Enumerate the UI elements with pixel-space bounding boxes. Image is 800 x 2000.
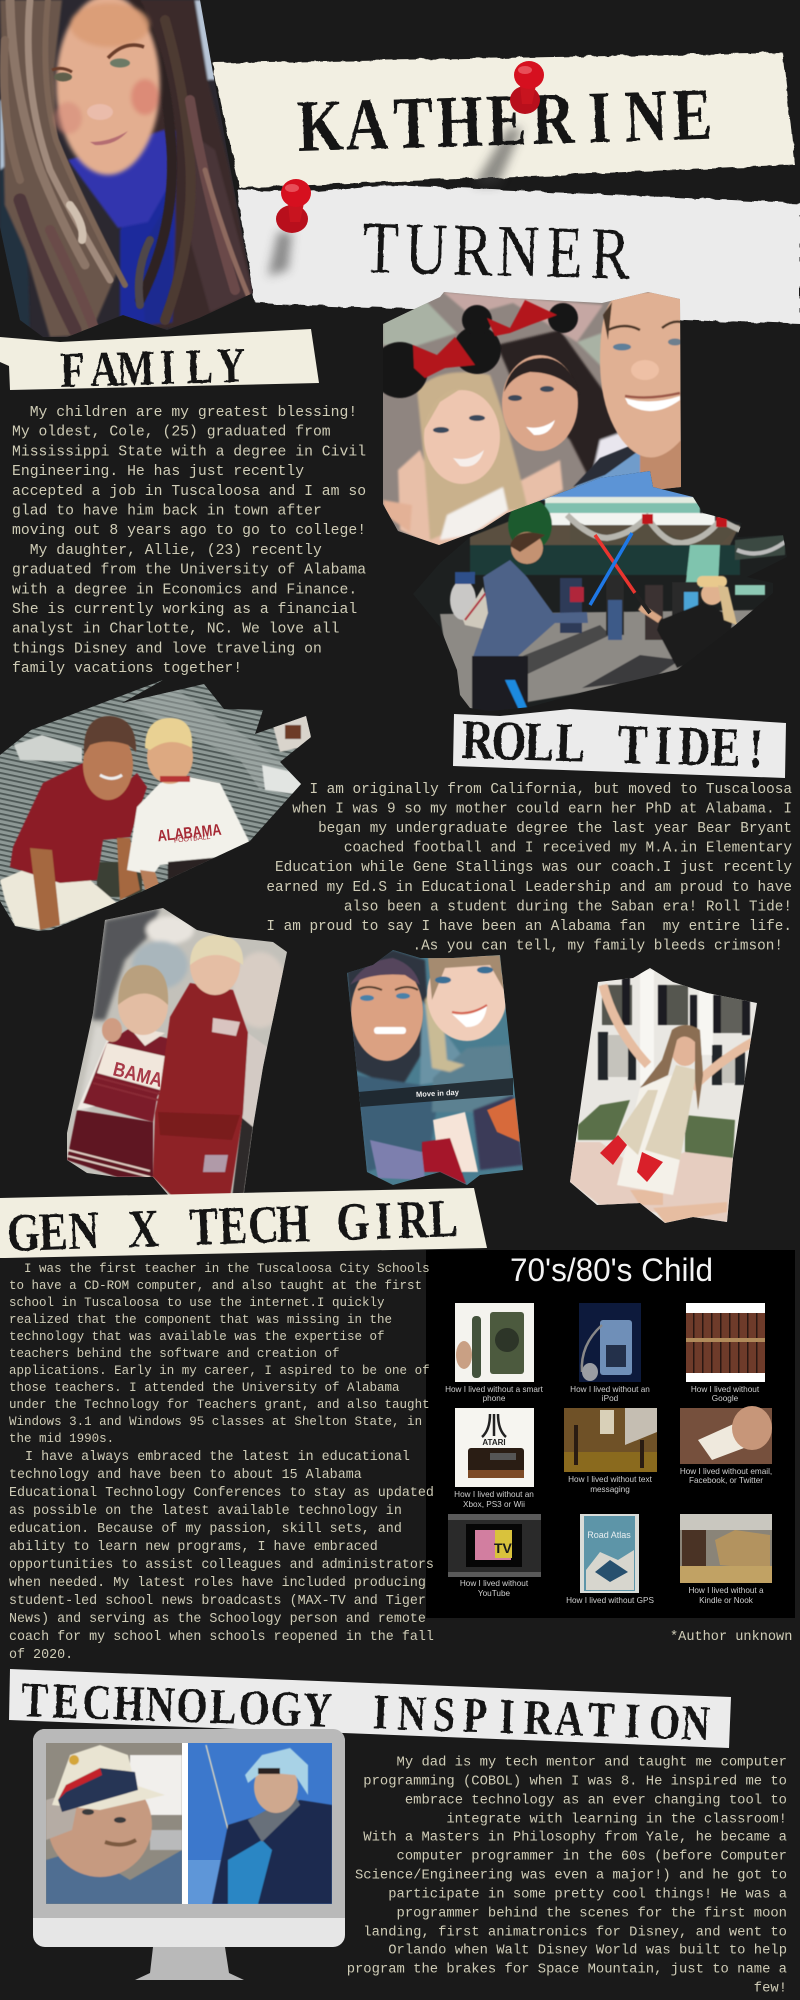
photo: family selfie with Minnie ears [372,290,685,550]
text: Roll Tide paragraph: when I was 9 so my mother could earn her PhD at Alabama. I [292,802,792,818]
text: family paragraph: graduated from the University of Alabama [12,563,366,579]
text: technology inspiration paragraph: My dad is my tech mentor and taught me computer [397,1754,787,1770]
text: technology inspiration paragraph: program the brakes for Space Mountain, just to name a [347,1962,787,1978]
text: Gen X paragraphs: technology that was available was the expertise of [9,1330,385,1344]
text: Roll Tide paragraph: I am originally from California, but moved to Tuscaloosa [309,782,792,798]
photo: dad in cap [46,1743,182,1904]
text: Gen X paragraphs: when needed. My latest roles have included producing [9,1576,426,1591]
text: Roll Tide paragraph: also been a student during the Saban era! Roll Tide! [344,899,792,915]
text: technology inspiration paragraph: participate in some pretty cool things! He was a [388,1886,787,1902]
icon: red push pin left [276,179,311,233]
text: Roll Tide paragraph: I am proud to say I have been an Alabama fan my entire life. [266,919,792,935]
text: Gen X paragraphs: opportunities to assist colleagues and administrators [9,1558,434,1573]
tile: handwritten letter: Facebook, or Twitter [689,1476,763,1485]
text: Gen X paragraphs: Educational Technology Conferences to stay as updated [9,1486,434,1501]
tile: wall phone [445,1303,544,1403]
photo: football coach and boy [0,675,320,935]
text: Gen X paragraphs: education. Because of my passion, skill sets, and [9,1522,402,1537]
monitor body [33,1729,345,1947]
heading: Family: FAMILY [60,338,246,398]
text: family paragraph: Engineering. He has just recently [12,464,304,480]
text: Gen X paragraphs: teachers behind the software and creation of [9,1347,339,1361]
text: author credit: *Author unknown [670,1630,792,1645]
pin shadows [268,128,522,276]
text: family paragraph [12,405,366,677]
text: Gen X paragraphs: realized that the component that was missing in the [9,1313,392,1327]
text: family paragraph: Mississippi State with a degree in Civil [12,444,366,460]
text: Gen X paragraphs: I was the first teacher in the Tuscaloosa City Schools [9,1262,430,1276]
icon: red push pin top [510,61,544,114]
tile: handwritten letter [680,1406,772,1485]
tile: MTV television [448,1514,541,1598]
photo: football coach and boy: ALABAMA [157,822,223,845]
heading strip: Gen X Tech Girl [0,1188,487,1263]
text: Gen X paragraphs: Windows 3.1 and Windows 95 classes at Shelton State, in [9,1415,422,1429]
text: family paragraph: moving out 8 years ago to go to college! [12,523,366,539]
text: Roll Tide paragraph: began my undergraduate degree the last year Bear Bryant [318,821,792,837]
text: Gen X paragraphs: under the Technology for Teachers grant, and also taught [9,1398,430,1412]
text: technology inspiration paragraph: programming (COBOL) when I was 8. He inspired me to [363,1774,787,1790]
tile: MTV television: How I lived without [460,1579,529,1588]
paper strip: Turner [237,185,800,324]
text: technology inspiration paragraph: With a Masters in Philosophy from Yale, he became a [363,1830,787,1846]
text: Roll Tide paragraph: .As you can tell, my family bleeds crimson! [412,938,783,954]
tile: library: Kindle or Nook [699,1596,754,1605]
text: Gen X paragraphs: student-led school news broadcasts (MAX-TV and Tiger [9,1594,426,1609]
text: Gen X paragraphs: News) and serving as the Schoology person and remote [9,1612,426,1627]
tile: Atari: How I lived without an [454,1490,534,1499]
tile: encyclopedias: Google [712,1394,739,1403]
heading strip: Roll Tide [453,708,786,779]
tile: Atari [454,1408,534,1509]
text: family paragraph: My children are my greatest blessing! [12,405,357,421]
tile: walkman: How I lived without an [570,1385,650,1394]
text: family paragraph: things Disney and love traveling on [12,641,322,657]
photo: cheerleader and boy in crimson: BAMA [111,1059,165,1092]
text: Gen X paragraphs: the mid 1990s. [9,1432,114,1446]
tile: road atlas [566,1514,654,1605]
tile: classroom notes: messaging [590,1485,630,1494]
tile: road atlas: Road Atlas [587,1530,631,1540]
tile: road atlas: How I lived without GPS [566,1596,654,1605]
photo: dad against blue sky [188,1743,332,1904]
text: Gen X paragraphs: as possible on the latest available technology in [9,1504,402,1519]
panel title: 70's/80's Child [510,1252,713,1288]
text: technology inspiration paragraph: few! [754,1980,787,1996]
tile: wall phone: phone [483,1394,506,1403]
heading strip: Technology Inspiration [9,1669,731,1751]
tile: wall phone: How I lived without a smart [445,1385,544,1394]
illustration: desktop monitor with photos of dad [33,1729,345,1980]
text: Gen X paragraphs: technology and have been to about 15 Alabama [9,1468,362,1483]
text: technology inspiration paragraph: Science/Engineering was even a major!) and he got to [355,1868,787,1884]
text: technology inspiration paragraph: programmer behind the scenes for the first moon [397,1906,787,1922]
tile: library: How I lived without a [688,1586,764,1595]
tile: classroom notes [564,1408,657,1494]
heading: Technology Inspiration: TECHNOLOGY INSPIRATION [20,1672,711,1751]
text: family paragraph: My oldest, Cole, (25) graduated from [12,425,331,441]
text: Gen X paragraphs: to have a CD-ROM computer, and also taught at the first [9,1279,422,1293]
heading strip: Family [0,329,319,398]
text: family paragraph: My daughter, Allie, (23) recently [12,543,322,559]
text: Gen X paragraphs [9,1262,434,1663]
text: Gen X paragraphs: of 2020. [9,1648,73,1663]
text: family paragraph: glad to have him back in town after [12,504,322,520]
text: family paragraph: family vacations together! [12,661,242,677]
text: technology inspiration paragraph: landing, first animatronics for Disney, and went to [363,1924,787,1940]
photo: graduate jumping [565,965,760,1225]
photo: Disney lightsaber duel [439,471,786,708]
text: technology inspiration paragraph [347,1754,787,1996]
text: family paragraph: analyst in Charlotte, NC. We love all [12,622,340,638]
text: Gen X paragraphs: applications. Early in my career, I aspired to be one of [9,1364,430,1378]
tile: encyclopedias: How I lived without [691,1385,760,1394]
photo: move-in day selfie [345,945,530,1190]
tile: Atari: ATARI [482,1438,506,1447]
heading: Roll Tide: ROLL TIDE! [461,708,764,779]
text: Gen X paragraphs: school in Tuscaloosa to use the internet.I quickly [9,1296,385,1310]
tile: handwritten letter: How I lived without email, [680,1467,772,1476]
tile: library [680,1514,772,1605]
tile: walkman [570,1303,650,1403]
text: Gen X paragraphs: those teachers. I attended the University of Alabama [9,1381,400,1395]
text: Roll Tide paragraph: coached football and I received my M.A.in Elementary [344,841,792,857]
photo: move-in day selfie: Move in day [416,1088,460,1099]
text: technology inspiration paragraph: computer programmer in the 60s (before Computer [397,1848,787,1864]
paper strip: Katherine [212,53,795,188]
tile: classroom notes: How I lived without text [568,1475,653,1484]
photo: cheerleader and boy in crimson [60,905,290,1205]
text: family paragraph: accepted a job in Tuscaloosa and I am so [12,484,366,500]
title: Katherine: KATHERINE [296,74,713,168]
text: technology inspiration paragraph: embrace technology as an ever changing tool to [405,1792,787,1808]
tile: encyclopedias [686,1303,765,1403]
heading: Gen X Tech Girl: GEN X TECH GIRL [6,1188,459,1263]
monitor stand [135,1947,244,1980]
text: family paragraph: with a degree in Economics and Finance. [12,582,357,598]
text: Gen X paragraphs: ability to learn new programs, I have embraced [9,1540,378,1555]
title: Turner: TURNER [362,207,631,295]
text: technology inspiration paragraph: Orlando when Walt Disney World was built to help [388,1942,787,1958]
text: Roll Tide paragraph: earned my Ed.S in Educational Leadership and am proud to have [266,880,792,896]
tile: MTV television: YouTube [478,1589,511,1598]
tile: walkman: iPod [602,1394,619,1403]
text: family paragraph: She is currently working as a financial [12,602,357,618]
portrait photo [0,0,260,340]
tile: MTV television: TV [494,1540,513,1556]
tile: Atari: Xbox, PS3 or Wii [463,1500,525,1509]
text: technology inspiration paragraph: integrate with learning in the classroom! [446,1812,787,1828]
photo: football coach and boy: FOOTBALL [174,834,211,845]
text: Gen X paragraphs: I have always embraced the latest in educational [9,1450,410,1465]
panel: 70's/80's Child meme [426,1250,795,1618]
text: Gen X paragraphs: coach for my school when schools reopened in the fall [9,1630,434,1645]
text: Roll Tide paragraph: Education while Gene Stallings was our coach.I just recently [275,860,792,876]
text: Roll Tide paragraph [266,782,792,954]
